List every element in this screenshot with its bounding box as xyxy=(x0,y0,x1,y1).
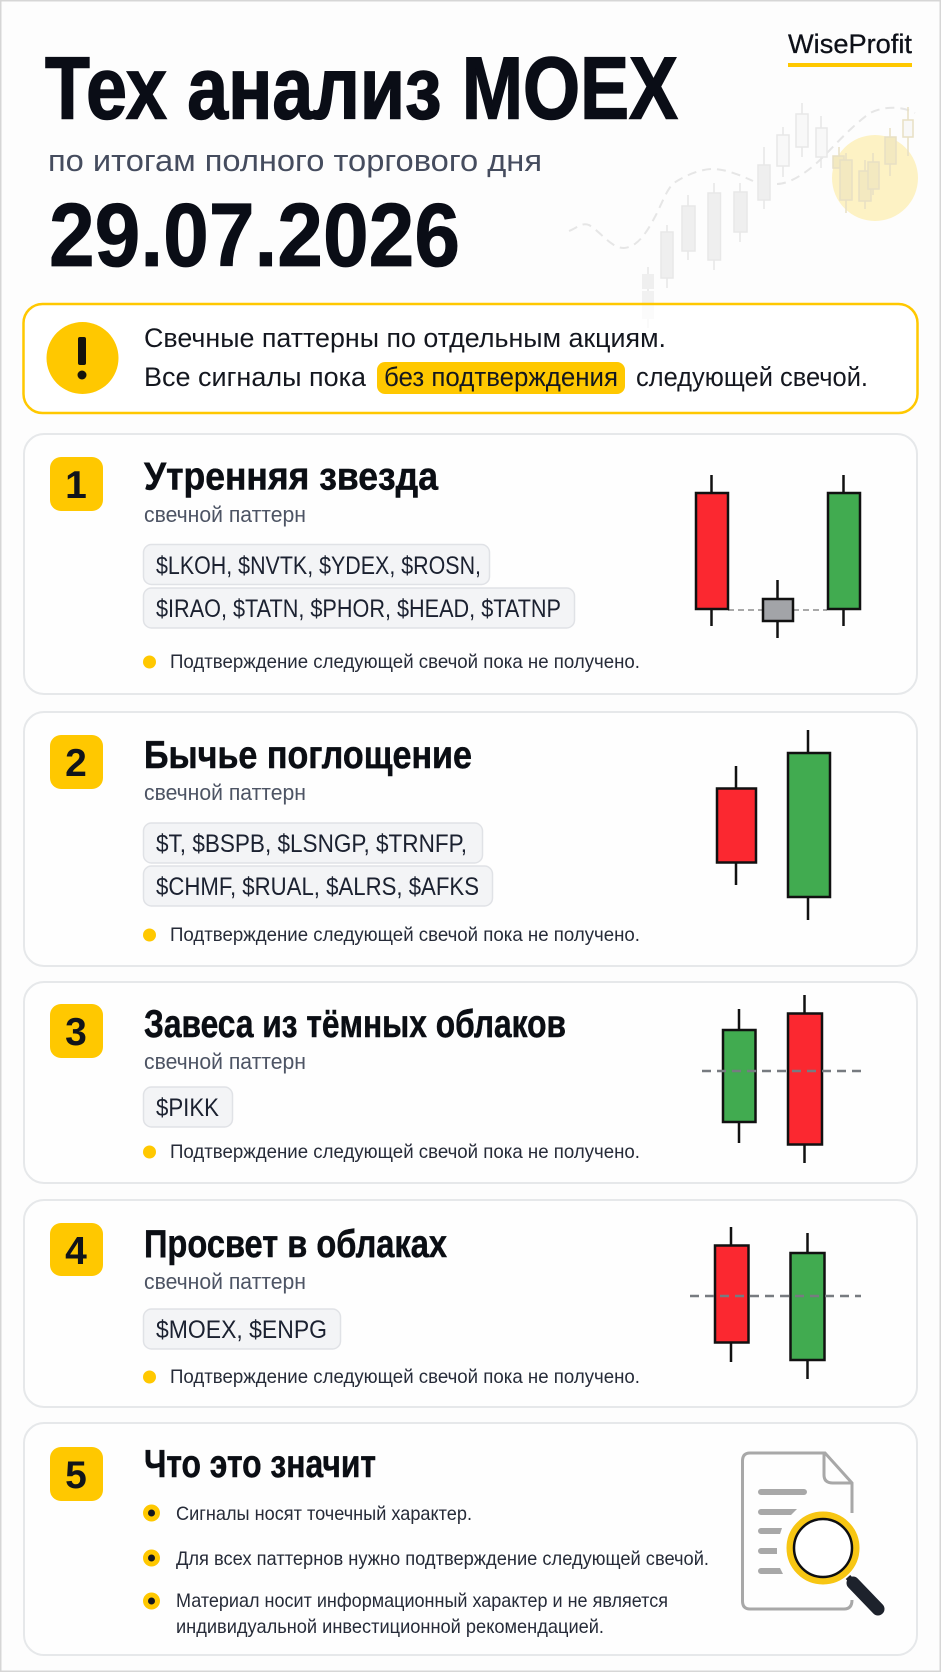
candlestick diagram: dark cloud cover xyxy=(702,995,863,1163)
callout xyxy=(24,304,918,413)
callout text line 2 xyxy=(144,362,868,394)
decorative background chart xyxy=(569,103,918,328)
candlestick diagram: bullish engulfing xyxy=(717,730,830,920)
note: Подтверждение следующей свечой пока не получено. xyxy=(170,1141,640,1163)
badge 3 xyxy=(50,1004,103,1058)
badge 2 xyxy=(50,735,103,789)
callout text line 2: следующей свечой. xyxy=(636,362,868,392)
tickers xyxy=(144,544,574,628)
tickers xyxy=(144,1087,232,1127)
bullet 1: Сигналы носят точечный характер. xyxy=(176,1503,472,1525)
tickers: $IRAO, $TATN, $PHOR, $HEAD, $TATNP xyxy=(156,595,561,623)
panel: 3 dark cloud cover xyxy=(24,982,917,1183)
bullet 3 xyxy=(143,1590,668,1638)
tickers: $LKOH, $NVTK, $YDEX, $ROSN, xyxy=(156,552,481,580)
candlestick diagram: piercing pattern xyxy=(690,1227,861,1379)
heading: Завеса из тёмных облаков xyxy=(144,1003,566,1046)
note: Подтверждение следующей свечой пока не получено. xyxy=(170,924,640,946)
tickers: $T, $BSPB, $LSNGP, $TRNFP, xyxy=(156,830,467,858)
bullet 3: индивидуальной инвестиционной рекомендацией. xyxy=(176,1616,604,1638)
icon: warning xyxy=(46,322,118,394)
date: 29.07.2026 xyxy=(49,186,460,286)
callout text line 2: Все сигналы пока xyxy=(144,362,367,392)
badge 3: 3 xyxy=(65,1011,87,1054)
brand logo: WiseProfit xyxy=(788,29,912,59)
panel: 5 what it means xyxy=(24,1423,917,1655)
panel: 2 bullish engulfing xyxy=(24,712,917,966)
tickers: $PIKK xyxy=(156,1094,219,1122)
bullet 3: Материал носит информационный характер и не является xyxy=(176,1590,668,1612)
subheading: свечной паттерн xyxy=(144,780,306,805)
callout text line 1: Свечные паттерны по отдельным акциям. xyxy=(144,323,666,353)
tickers: $MOEX, $ENPG xyxy=(156,1316,327,1344)
subheading: свечной паттерн xyxy=(144,1049,306,1074)
tickers xyxy=(144,1309,340,1349)
heading: Утренняя звезда xyxy=(144,456,438,498)
badge 1 xyxy=(50,457,103,511)
candlestick diagram: morning star xyxy=(696,475,860,638)
badge 1: 1 xyxy=(65,464,87,507)
badge 5 xyxy=(50,1447,103,1501)
badge 2: 2 xyxy=(65,742,87,785)
heading: Бычье поглощение xyxy=(144,734,472,777)
icon: document with magnifier xyxy=(742,1453,878,1609)
badge 4: 4 xyxy=(65,1230,87,1273)
subheading: свечной паттерн xyxy=(144,1269,306,1294)
tickers: $CHMF, $RUAL, $ALRS, $AFKS xyxy=(156,873,479,901)
note: Подтверждение следующей свечой пока не получено. xyxy=(170,1366,640,1388)
subtitle: по итогам полного торгового дня xyxy=(48,143,542,178)
callout text line 2: без подтверждения xyxy=(384,362,618,392)
heading: Просвет в облаках xyxy=(144,1223,447,1266)
title: Тех анализ MOEX xyxy=(45,38,678,138)
note: Подтверждение следующей свечой пока не получено. xyxy=(170,651,640,673)
heading: Что это значит xyxy=(144,1443,376,1486)
panel: 1 morning star xyxy=(24,434,917,694)
subheading: свечной паттерн xyxy=(144,502,306,527)
badge 5: 5 xyxy=(65,1454,87,1497)
badge 4 xyxy=(50,1223,103,1276)
bullet list xyxy=(143,1503,709,1638)
bullet 2: Для всех паттернов нужно подтверждение следующей свечой. xyxy=(176,1548,709,1570)
panel: 4 piercing pattern xyxy=(24,1200,917,1407)
tickers xyxy=(144,823,492,906)
